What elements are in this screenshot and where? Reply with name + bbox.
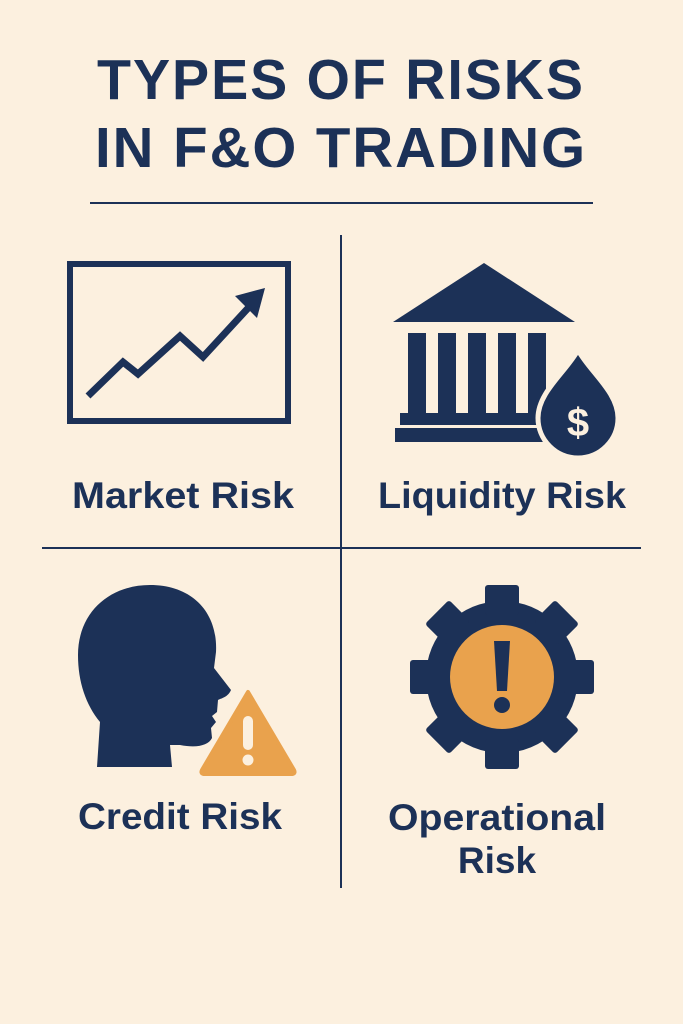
icon: market chart (70, 264, 288, 421)
icon: head with warning (78, 585, 295, 774)
heading: operational risk: Operational (388, 797, 606, 838)
icon: bank with drop: $ (567, 401, 589, 445)
heading: credit risk: Credit Risk (78, 796, 282, 837)
heading: operational risk (388, 797, 606, 881)
heading: liquidity risk: Liquidity Risk (378, 475, 626, 516)
title (95, 48, 587, 180)
icon: gear with exclamation (410, 585, 594, 769)
heading: market risk: Market Risk (72, 475, 294, 516)
icon: bank with drop (393, 263, 618, 458)
heading: operational risk: Risk (458, 840, 536, 881)
title: TYPES OF RISKS (97, 48, 585, 112)
title: IN F&O TRADING (95, 116, 587, 180)
